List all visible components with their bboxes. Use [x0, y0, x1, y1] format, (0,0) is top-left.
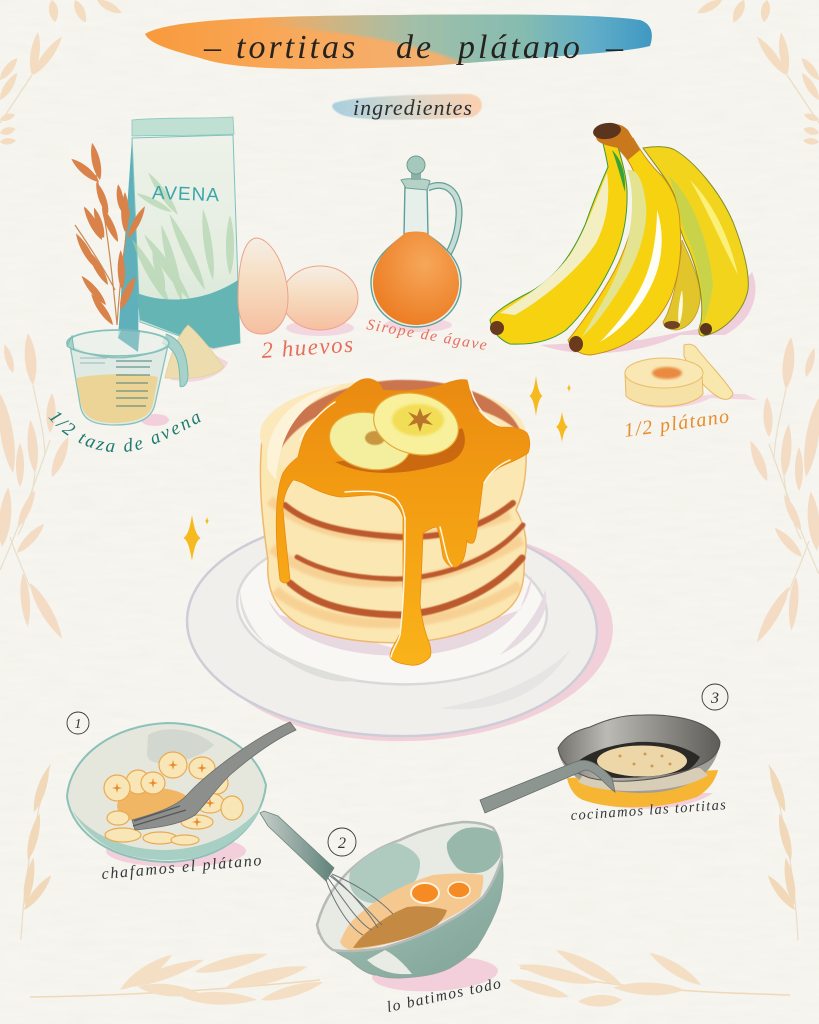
- step 3: frying pan: [480, 684, 728, 813]
- bag label: AVENA: [152, 183, 220, 206]
- bag side gusset: [118, 138, 140, 352]
- cup glass: [70, 345, 168, 425]
- stack body: [260, 440, 526, 643]
- title text: plátano: [456, 29, 583, 66]
- ingredient: oat flour pile: [165, 325, 228, 382]
- border wheat: bottom right branch: [507, 944, 790, 1007]
- ingredient: measuring cup: [67, 328, 188, 426]
- banana centres: [112, 760, 222, 827]
- jug spout and stopper: [401, 179, 430, 190]
- ingredient: bananas: [490, 121, 755, 355]
- bowl interior: [317, 822, 502, 951]
- pan underside yellow: [567, 770, 718, 807]
- bowl body: [318, 860, 503, 978]
- plate: [183, 509, 617, 748]
- ingredient: banana slices: [625, 344, 757, 408]
- cup rim: [67, 330, 169, 356]
- egg back: [282, 266, 358, 330]
- border wheat: lower left sprig: [21, 765, 54, 940]
- pancake in pan: [597, 746, 687, 776]
- label: lo batimos todo: lo batimos todo: [385, 975, 504, 1016]
- bowl interior right blob: [447, 827, 500, 873]
- flat slice: [625, 372, 703, 406]
- pancake top: [260, 380, 526, 490]
- left banana: [490, 143, 627, 344]
- title brush stroke: [145, 14, 652, 69]
- step number 2: [328, 828, 356, 856]
- cup measure marks: [116, 361, 152, 406]
- banana tips: [490, 321, 504, 335]
- label: cocinamos las tortitas: cocinamos las tortitas: [570, 797, 728, 824]
- label: 1/2 plátano: 1/2 plátano: [623, 405, 732, 442]
- whisk: [260, 811, 393, 935]
- title text: tortitas: [236, 29, 358, 66]
- ingredient: oat stalk: [69, 142, 148, 327]
- title text: de: [396, 29, 434, 66]
- left banana pale side: [500, 173, 608, 315]
- border wheat: left side: [0, 333, 73, 641]
- right banana: [643, 147, 748, 336]
- pancake brown bands: [285, 503, 523, 615]
- ingredient: oat bag: [118, 117, 240, 352]
- cup oat liquid: [76, 374, 158, 423]
- label: chafamos el plátano: chafamos el plátano: [101, 852, 264, 883]
- bowl interior left blob: [349, 843, 420, 903]
- step 2: bowl with whisk: [260, 811, 503, 994]
- label: 2 huevos: 2 huevos: [261, 332, 355, 363]
- banana shadow: [540, 275, 753, 353]
- ingredient: eggs: [238, 238, 358, 336]
- bowl bottom highlight: [367, 950, 412, 974]
- syrup highlights: [300, 385, 510, 657]
- bowl shadow: [371, 954, 499, 994]
- middle banana pale side: [582, 170, 646, 337]
- title text: –: [605, 29, 626, 66]
- stack shadow: [268, 575, 532, 656]
- border wheat: lower right sprig: [765, 765, 798, 940]
- jug syrup: [373, 232, 459, 325]
- plate pink shadow: [203, 520, 617, 748]
- pan inner wall: [558, 715, 720, 781]
- cup handle: [162, 334, 188, 387]
- title banner: [145, 14, 652, 69]
- pancake dots: [618, 752, 672, 768]
- pan body: [558, 742, 720, 793]
- step number 3: [702, 684, 728, 710]
- step number 3: 3: [710, 690, 719, 707]
- pancake stack: [260, 379, 532, 665]
- plate inner well: [233, 524, 551, 692]
- back banana slice: [324, 405, 416, 477]
- jug neck: [371, 184, 461, 327]
- egg yolks: [411, 883, 439, 903]
- syrup dark under banana: [335, 428, 465, 473]
- bowl teal base: [72, 805, 262, 860]
- ingredient: agave syrup jug: [371, 156, 461, 332]
- bag blue bottom: [137, 280, 240, 348]
- step number 2: 2: [338, 835, 346, 852]
- step number 1: 1: [74, 717, 82, 732]
- border wheat: top right: [695, 0, 819, 145]
- pan dark bottom: [577, 742, 700, 778]
- subtitle: ingredientes: ingredientes: [353, 95, 473, 120]
- sparkles: [184, 376, 571, 561]
- bowl shadow: [106, 835, 246, 867]
- bag body: [132, 135, 240, 348]
- plate outer: [183, 509, 601, 743]
- bowl body: [67, 723, 266, 862]
- border wheat: bottom left branch: [30, 948, 325, 1006]
- bowl interior shade: [147, 729, 214, 763]
- border wheat: top left: [0, 0, 124, 145]
- label: 1/2 taza de avena: 1/2 taza de avena: [48, 412, 202, 452]
- stack band shading: [270, 500, 522, 623]
- title text: –: [203, 29, 224, 66]
- small back banana: [663, 240, 700, 330]
- pan handle: [480, 760, 615, 813]
- bag reflected in cup: [118, 328, 140, 352]
- middle banana: [568, 138, 681, 355]
- step number 1: [67, 712, 89, 734]
- label: sirope de agave: Sirope de ágave: [365, 316, 490, 354]
- fork: [132, 722, 296, 830]
- banana stem: [596, 124, 640, 160]
- pan shadow: [573, 793, 713, 809]
- bag leaves decoration: [128, 170, 234, 307]
- mashed banana: [104, 752, 243, 845]
- standing slice: [684, 344, 733, 399]
- jug handle: [428, 186, 459, 258]
- border wheat: right side: [746, 337, 819, 645]
- step 1: bowl: [67, 712, 296, 867]
- egg front: [238, 238, 288, 334]
- middle banana white stripe: [600, 210, 662, 342]
- batter: [340, 874, 483, 950]
- syrup: [276, 379, 530, 665]
- bag top seal: [132, 117, 234, 136]
- front banana slice: [367, 384, 465, 464]
- oat mass: [353, 906, 447, 948]
